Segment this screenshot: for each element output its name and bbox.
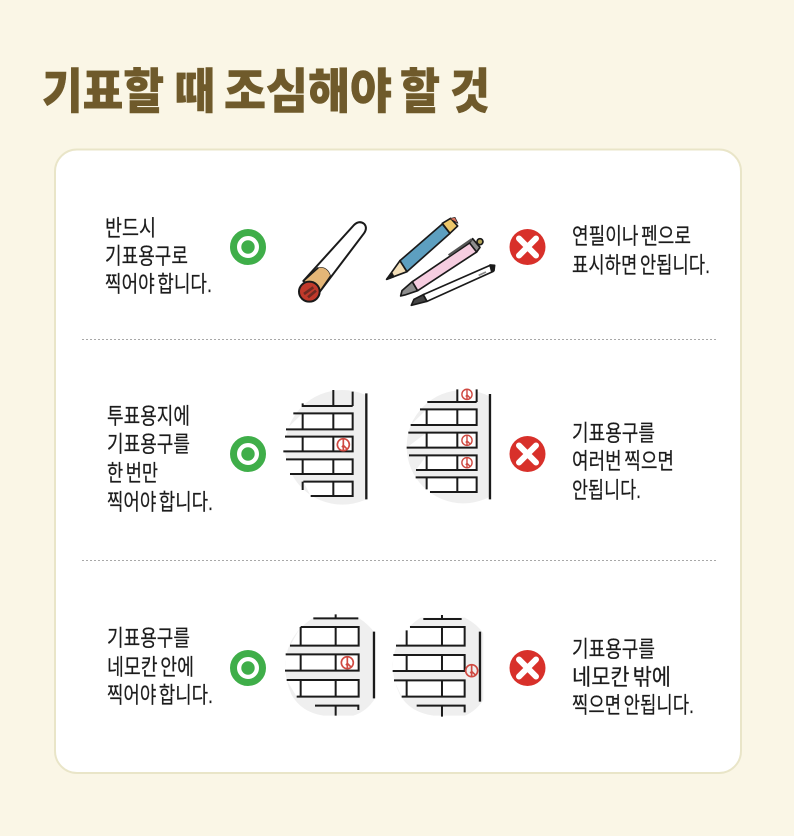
- text: row 3 wrong instruction: 기표용구를: [572, 637, 655, 662]
- icon: correct mark row 2: [234, 440, 262, 468]
- icon: wrong mark row 1: [510, 229, 546, 265]
- text: row 2 correct instruction: 투표용지에: [107, 404, 190, 429]
- illustration: stamp inside the box: [285, 614, 375, 716]
- text: row 2 correct instruction: 한 번만: [107, 461, 158, 486]
- text: row 1 correct instruction: [105, 216, 212, 297]
- title: 조심해야: [224, 66, 392, 119]
- text: row 1 correct instruction: 반드시: [105, 216, 156, 241]
- text: row 1 wrong instruction: 연필이나 펜으로: [572, 224, 691, 249]
- text: row 2 wrong instruction: 안됩니다.: [572, 478, 641, 503]
- panel: card: [55, 150, 741, 773]
- icon: wrong mark row 3: [510, 650, 546, 686]
- text: row 1 wrong instruction: 표시하면 안됩니다.: [572, 253, 710, 278]
- icon: stamp tool: [299, 222, 366, 302]
- text: row 3 wrong instruction: [572, 637, 694, 718]
- icon: correct mark row 1: [234, 232, 262, 262]
- text: row 2 correct instruction: [107, 404, 213, 515]
- title: 것: [450, 66, 490, 119]
- title: 때: [175, 66, 215, 119]
- text: row 1 wrong instruction: [572, 224, 710, 278]
- text: row 2 wrong instruction: 여러번 찍으면: [572, 449, 674, 474]
- title: 할: [400, 66, 440, 119]
- text: row 1 correct instruction: 찍어야 합니다.: [105, 272, 212, 297]
- text: row 2 wrong instruction: 기표용구를: [572, 421, 655, 446]
- illustration: ballot with multiple stamps: [406, 388, 492, 504]
- text: row 3 correct instruction: 찍어야 합니다.: [107, 683, 213, 708]
- text: row 3 wrong instruction: 네모칸 밖에: [572, 665, 671, 690]
- title: [42, 66, 490, 119]
- text: row 3 correct instruction: 네모칸 안에: [107, 655, 194, 680]
- illustration: ballot with one stamp: [283, 390, 368, 504]
- icon: correct mark row 3: [234, 654, 262, 682]
- text: row 3 correct instruction: [107, 626, 213, 708]
- title: 기표할: [42, 66, 164, 119]
- text: row 2 wrong instruction: [572, 421, 674, 503]
- text: row 2 correct instruction: 찍어야 합니다.: [107, 490, 213, 515]
- text: row 3 correct instruction: 기표용구를: [107, 626, 190, 651]
- icon: wrong mark row 2: [510, 436, 546, 472]
- illustration: stamp outside the box: [393, 615, 483, 717]
- infographic canvas: [43, 67, 742, 774]
- text: row 2 correct instruction: 기표용구를: [107, 432, 190, 457]
- icon: pencil and pens: [387, 217, 495, 305]
- text: row 1 correct instruction: 기표용구로: [105, 244, 188, 269]
- text: row 3 wrong instruction: 찍으면 안됩니다.: [572, 693, 694, 718]
